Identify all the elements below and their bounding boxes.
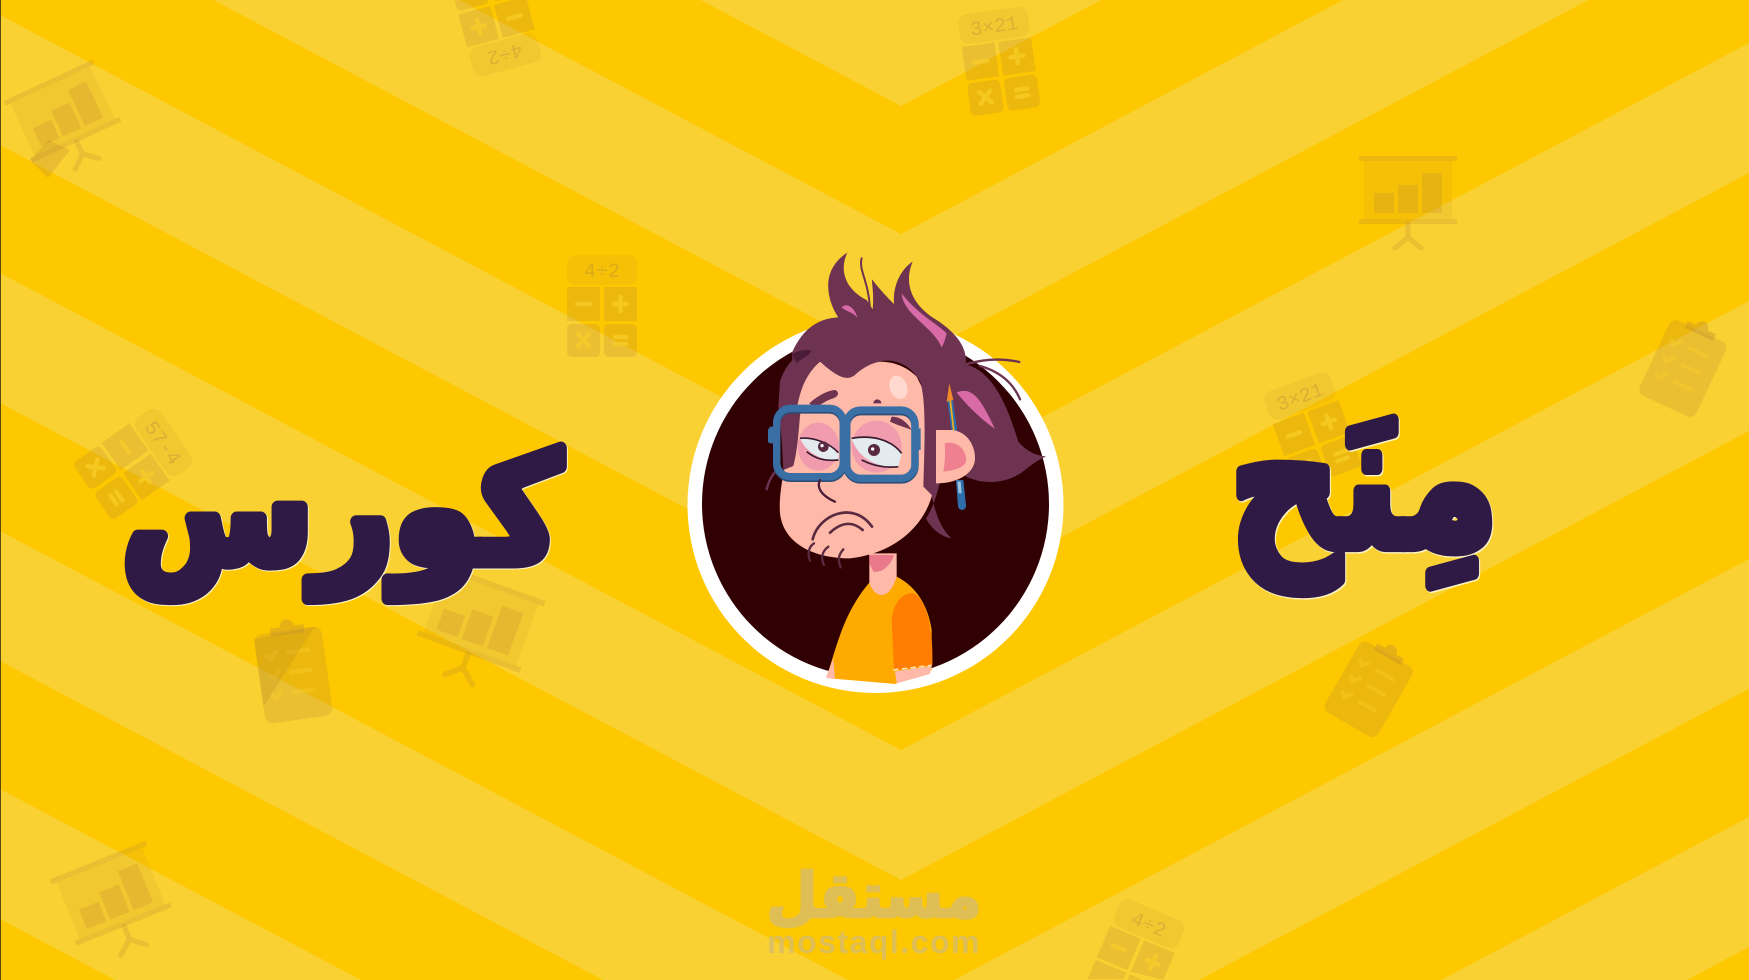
sleeve stitch — [893, 665, 932, 670]
left eye white — [800, 438, 838, 460]
character — [767, 253, 1046, 684]
right eye white — [852, 437, 902, 467]
icon: calculator left of portrait: 4÷2 — [584, 261, 620, 284]
right side hair — [917, 373, 957, 538]
nose — [819, 480, 835, 502]
back hair — [937, 363, 1046, 482]
hair flyaway — [861, 258, 870, 308]
icon: calculator top centre — [957, 6, 1041, 116]
shirt sleeve — [892, 593, 932, 671]
icon: calculator top centre: 3×21 — [969, 13, 1020, 43]
icon: calculator far left: 57-4 — [138, 418, 185, 470]
icon: clipboard lower left — [252, 615, 333, 724]
mouth — [813, 513, 872, 539]
face — [780, 362, 933, 558]
icon: calculator behind right word — [1262, 370, 1362, 490]
eyelid lines — [800, 437, 902, 467]
eyebrows — [809, 390, 912, 430]
side hair — [778, 351, 820, 470]
icon: presentation board under left word — [407, 564, 546, 698]
icon: calculator bottom — [1088, 896, 1187, 980]
hair tip dark — [792, 350, 812, 363]
word left: course: كورس — [122, 424, 562, 598]
loose hair strands — [967, 359, 1020, 399]
chin stubble — [809, 543, 843, 567]
arm — [826, 658, 932, 683]
sideburn strand — [767, 468, 778, 489]
white ring — [688, 317, 1064, 693]
icon: calculator bottom: 4÷2 — [1127, 909, 1169, 944]
word right: grants: مِنَح — [1229, 371, 1499, 592]
icon: clipboard far right — [1637, 309, 1733, 419]
glasses shadow — [777, 410, 915, 480]
icon: clipboard lower right — [1322, 630, 1420, 740]
icon: calculator top — [449, 0, 543, 78]
neck shadow — [869, 555, 894, 572]
neck — [869, 553, 897, 598]
watermark logo — [766, 861, 982, 960]
ear — [936, 430, 975, 483]
back hair highlight — [957, 391, 995, 429]
inner ear — [943, 443, 966, 472]
icon: presentation board top right — [1359, 156, 1457, 248]
icon: calculator top: 4÷2 — [484, 37, 525, 68]
watermark url: mostaql.com — [767, 924, 981, 960]
pupils — [818, 441, 829, 452]
eye sockets — [798, 423, 839, 471]
glasses — [777, 408, 915, 478]
hair highlights — [842, 293, 947, 347]
hair strip over face inside left lens — [780, 410, 801, 470]
icon: calculator behind right word: 3×21 — [1274, 380, 1327, 418]
glasses tabs — [768, 427, 921, 450]
forehead shine — [886, 373, 911, 402]
icon: presentation board bottom left — [50, 841, 181, 969]
icon: arrow on presentation board — [30, 140, 70, 178]
icon: calculator left of portrait — [567, 255, 637, 357]
shirt — [827, 577, 932, 684]
pencil — [947, 383, 966, 510]
icon: presentation board top left — [4, 60, 131, 184]
icon: calculator far left — [72, 405, 196, 521]
watermark Arabic name: مستقل — [766, 861, 982, 932]
portrait: worried character in circle — [688, 253, 1064, 693]
dark disc — [702, 330, 1049, 678]
hair top — [792, 253, 966, 400]
